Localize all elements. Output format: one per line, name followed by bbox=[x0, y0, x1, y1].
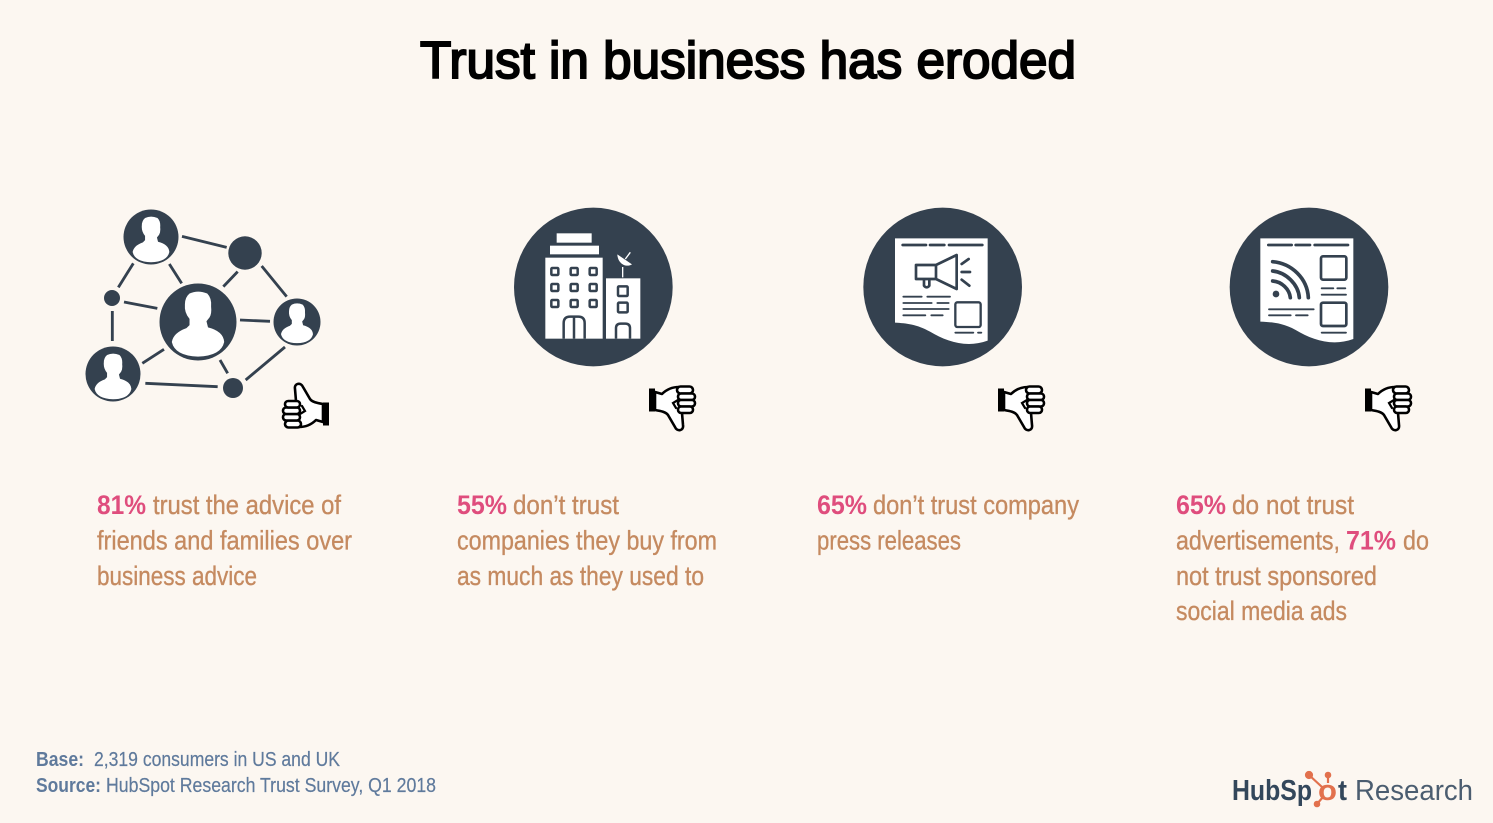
text: 81% trust: business advice bbox=[97, 561, 257, 591]
text: 81% trust bbox=[97, 490, 352, 591]
text: 65% and 71%: not trust sponsored bbox=[1176, 561, 1377, 591]
panel: press releases bbox=[817, 208, 1079, 556]
source note: 2,319 consumers in US and UK bbox=[94, 749, 341, 771]
text: 65% and 71%: social media ads bbox=[1176, 596, 1347, 626]
icon: page with RSS feed bbox=[1230, 208, 1388, 366]
text: 65% and 71%: 65% bbox=[1176, 490, 1226, 520]
panel: advertisements bbox=[1176, 208, 1429, 626]
panel: friends and families bbox=[86, 210, 352, 591]
icon: thumbs down bbox=[1365, 386, 1411, 430]
text: 65% and 71% bbox=[1176, 490, 1429, 626]
source note: Source: bbox=[36, 775, 101, 797]
logo: HubSpot Research: Research bbox=[1355, 775, 1473, 807]
text: 65% and 71%: do not trust bbox=[1232, 490, 1354, 520]
source note bbox=[36, 749, 436, 797]
icon: press release with megaphone bbox=[863, 208, 1022, 366]
text: 65% press releases: press releases bbox=[817, 526, 961, 556]
text: 65% and 71%: do bbox=[1403, 526, 1429, 556]
text: 65% press releases: don’t trust company bbox=[873, 490, 1079, 520]
text: 65% and 71%: advertisements, bbox=[1176, 526, 1340, 556]
icon: thumbs down bbox=[649, 386, 695, 430]
text: 55% don't trust: as much as they used to bbox=[457, 561, 704, 591]
source note: Base: bbox=[36, 749, 84, 771]
text: 65% press releases bbox=[817, 490, 1079, 556]
text: 81% trust: trust the advice of bbox=[153, 490, 341, 520]
text: 55% don't trust: 55% bbox=[457, 490, 507, 520]
logo: HubSpot Research: t bbox=[1338, 775, 1347, 807]
text: 55% don't trust bbox=[457, 490, 717, 591]
text: 55% don't trust: companies they buy from bbox=[457, 526, 717, 556]
icon: thumbs down bbox=[998, 386, 1044, 430]
icon: thumbs up bbox=[283, 384, 329, 428]
text: 81% trust: friends and families over bbox=[97, 526, 352, 556]
text: 65% press releases: 65% bbox=[817, 490, 867, 520]
text: 81% trust: 81% bbox=[97, 490, 146, 520]
source note: HubSpot Research Trust Survey, Q1 2018 bbox=[106, 775, 436, 797]
panel: companies bbox=[457, 208, 717, 591]
text: 55% don't trust: don’t trust bbox=[513, 490, 619, 520]
logo: HubSpot Research: HubSp bbox=[1232, 775, 1312, 807]
text: 65% and 71%: 71% bbox=[1346, 526, 1396, 556]
logo: HubSpot Research bbox=[1232, 772, 1473, 807]
icon: office buildings bbox=[514, 208, 673, 366]
icon: people network bbox=[86, 210, 320, 402]
logo: HubSpot Research: o bbox=[1318, 775, 1337, 807]
title: Trust in business has eroded bbox=[420, 32, 1076, 90]
